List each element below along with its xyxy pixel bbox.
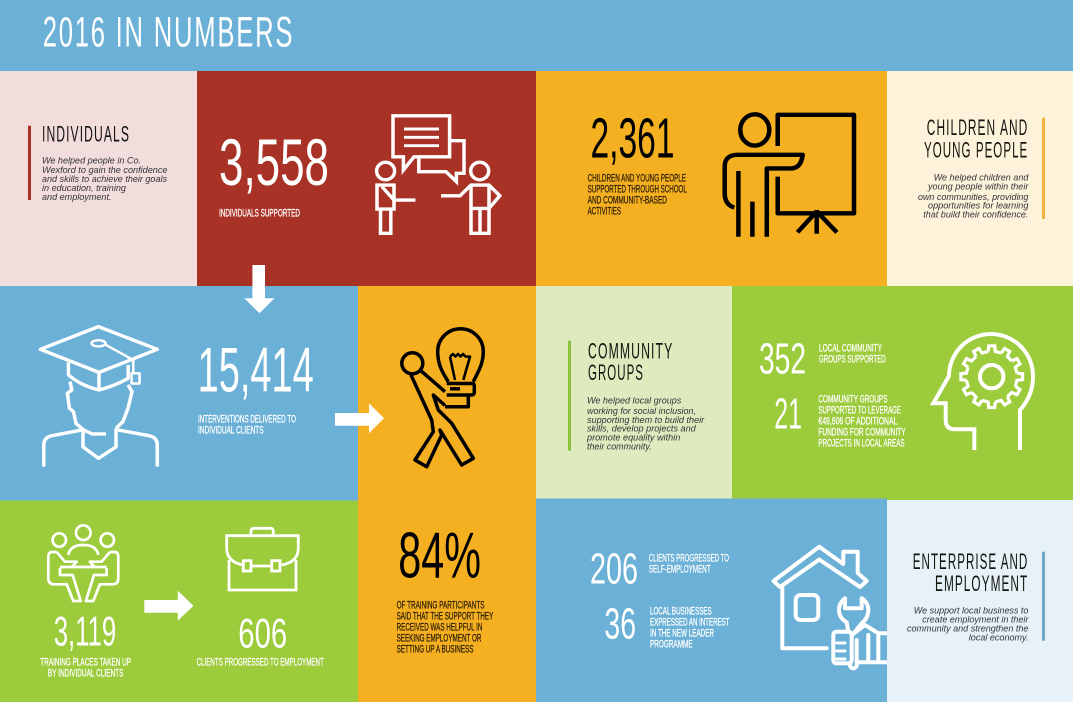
text block: community description: working for social inclusion, [587,406,696,417]
text block: individuals description: We helped people in Co. [42,156,141,167]
text block: community description: their community. [587,442,652,453]
panel: community groups intro [536,286,732,498]
text block: children description [918,173,1029,221]
accent bar [28,126,31,200]
label: training participants: RECEIVED WAS HELPFUL IN [397,622,482,634]
label: training participants: OF TRAINING PARTICIPANTS [397,600,484,612]
label: additional funding [818,394,906,450]
text block: individuals description: and skills to achieve their goals [42,174,167,185]
label: children supported: SUPPORTED THROUGH SCHOOL [588,183,687,195]
label: local businesses: EXPRESSED AN INTEREST [650,617,730,629]
stat: 3,119: 3,119 [54,608,116,655]
text block: community description: skills, develop projects and [587,424,696,435]
label: training participants [397,600,493,656]
heading: community groups: COMMUNITY [588,338,673,363]
stat: 206: 206 [590,545,638,593]
text block: children description: that build their confidence. [923,210,1028,221]
panel: interventions [0,286,358,500]
title: 2016 IN NUMBERS [43,9,294,57]
icon: head with gear [933,334,1033,450]
text block: enterprise description: community and strengthen the [907,623,1028,634]
stat: 606: 606 [238,609,287,656]
arrow: right from interventions to bulb [335,403,384,433]
label: training places: TRAINING PLACES TAKEN UP [40,657,131,669]
accent bar [568,341,571,451]
arrow: down from individuals to interventions [244,265,274,313]
text block: enterprise description: local economy. [969,633,1028,644]
stat: 21: 21 [774,390,802,438]
label: self-employment: SELF-EMPLOYMENT [649,564,711,576]
text block: individuals description: in education, training [42,183,127,194]
label: training places: BY INDIVIDUAL CLIENTS [48,668,123,680]
label: groups supported: LOCAL COMMUNITY [819,343,882,355]
label: interventions delivered: INTERVENTIONS DELIVERED TO [198,414,296,426]
arrow: right from training to employment [144,591,194,621]
icon: briefcase [227,528,298,590]
label: interventions delivered [198,414,296,437]
text block: children description: own communities, providing [918,192,1029,203]
stat: 84%: 84% [398,520,481,592]
label: local businesses [650,606,730,651]
panel: children stats [536,71,887,286]
panel: enterprise stats [536,498,890,702]
icon: group meeting at table [48,525,118,601]
icon: person carrying light bulb [402,329,483,467]
stat: 352: 352 [759,335,806,383]
panel: individuals intro [0,71,197,286]
label: groups supported [819,343,886,366]
panel: community stats [732,286,1073,500]
text block: community description: promote equality within [586,433,680,444]
accent bar [1042,118,1045,219]
label: children supported: CHILDREN AND YOUNG PEOPLE [588,173,686,185]
icon: teacher at board [725,114,854,237]
accent bar [1042,552,1045,641]
label: additional funding: COMMUNITY GROUPS [818,394,888,406]
icon: two people talking [377,116,500,233]
label: children supported: ACTIVITIES [588,205,621,217]
panel: children and young people intro [887,71,1073,286]
label: local businesses: IN THE NEW LEADER [650,628,714,640]
text block: community description [586,396,705,453]
label: self-employment [649,553,729,576]
label: additional funding: FUNDING FOR COMMUNITY [818,427,906,439]
icon: house with wrench [774,547,890,668]
label: interventions delivered: INDIVIDUAL CLIENTS [198,425,264,437]
stat: 3,558: 3,558 [219,125,329,199]
panel: enterprise and employment intro [887,500,1073,702]
label: children supported [588,173,687,217]
text block: community description: We helped local groups [587,396,681,407]
text block: community description: supporting them to build their [587,415,705,426]
stat: 36: 36 [604,600,636,648]
label: training participants: SETTING UP A BUSINESS [397,644,474,656]
text block: individuals description: and employment. [42,192,112,203]
label: clients progressed to employment: CLIENTS PROGRESSED TO EMPLOYMENT [197,657,324,669]
label: children supported: AND COMMUNITY-BASED [588,194,667,206]
label: additional funding: SUPPORTED TO LEVERAGE [818,405,901,417]
panel: training places and employment [0,500,358,702]
heading: community groups: GROUPS [588,360,644,385]
label: local businesses: PROGRAMME [650,639,693,651]
label: self-employment: CLIENTS PROGRESSED TO [649,553,729,565]
heading: individuals: INDIVIDUALS [42,122,130,147]
label: additional funding: €49,606 OF ADDITIONAL [818,416,897,428]
label: additional funding: PROJECTS IN LOCAL AREAS [818,438,905,450]
label: local businesses: LOCAL BUSINESSES [650,606,712,618]
label: groups supported: GROUPS SUPPORTED [819,354,886,366]
stat: 2,361: 2,361 [590,106,674,169]
heading: children and young people [924,115,1028,162]
label: training participants: SEEKING EMPLOYMENT OR [397,633,482,645]
text block: enterprise description: create employment in their [922,614,1029,625]
icon: graduate with cap [40,327,157,467]
text block: children description: opportunities for learning [928,201,1029,212]
heading: enterprise and employment [913,549,1028,596]
text block: enterprise description: We support local business to [914,605,1029,616]
text block: children description: We helped children and [934,173,1029,184]
text block: children description: young people within their [927,182,1029,193]
label: training participants: SAID THAT THE SUPPORT THEY [397,611,493,623]
text block: individuals description [42,156,168,203]
label: individuals supported: INDIVIDUALS SUPPORTED [219,208,300,220]
label: training places [40,657,131,680]
panel: training outcomes orange [358,286,536,702]
heading: community groups [588,338,673,385]
text block: individuals description: Wexford to gain the confidence [42,165,168,176]
stat: 15,414: 15,414 [198,336,314,406]
panel: individuals supported [197,71,536,286]
header banner [0,0,1073,71]
text block: enterprise description [907,605,1029,644]
